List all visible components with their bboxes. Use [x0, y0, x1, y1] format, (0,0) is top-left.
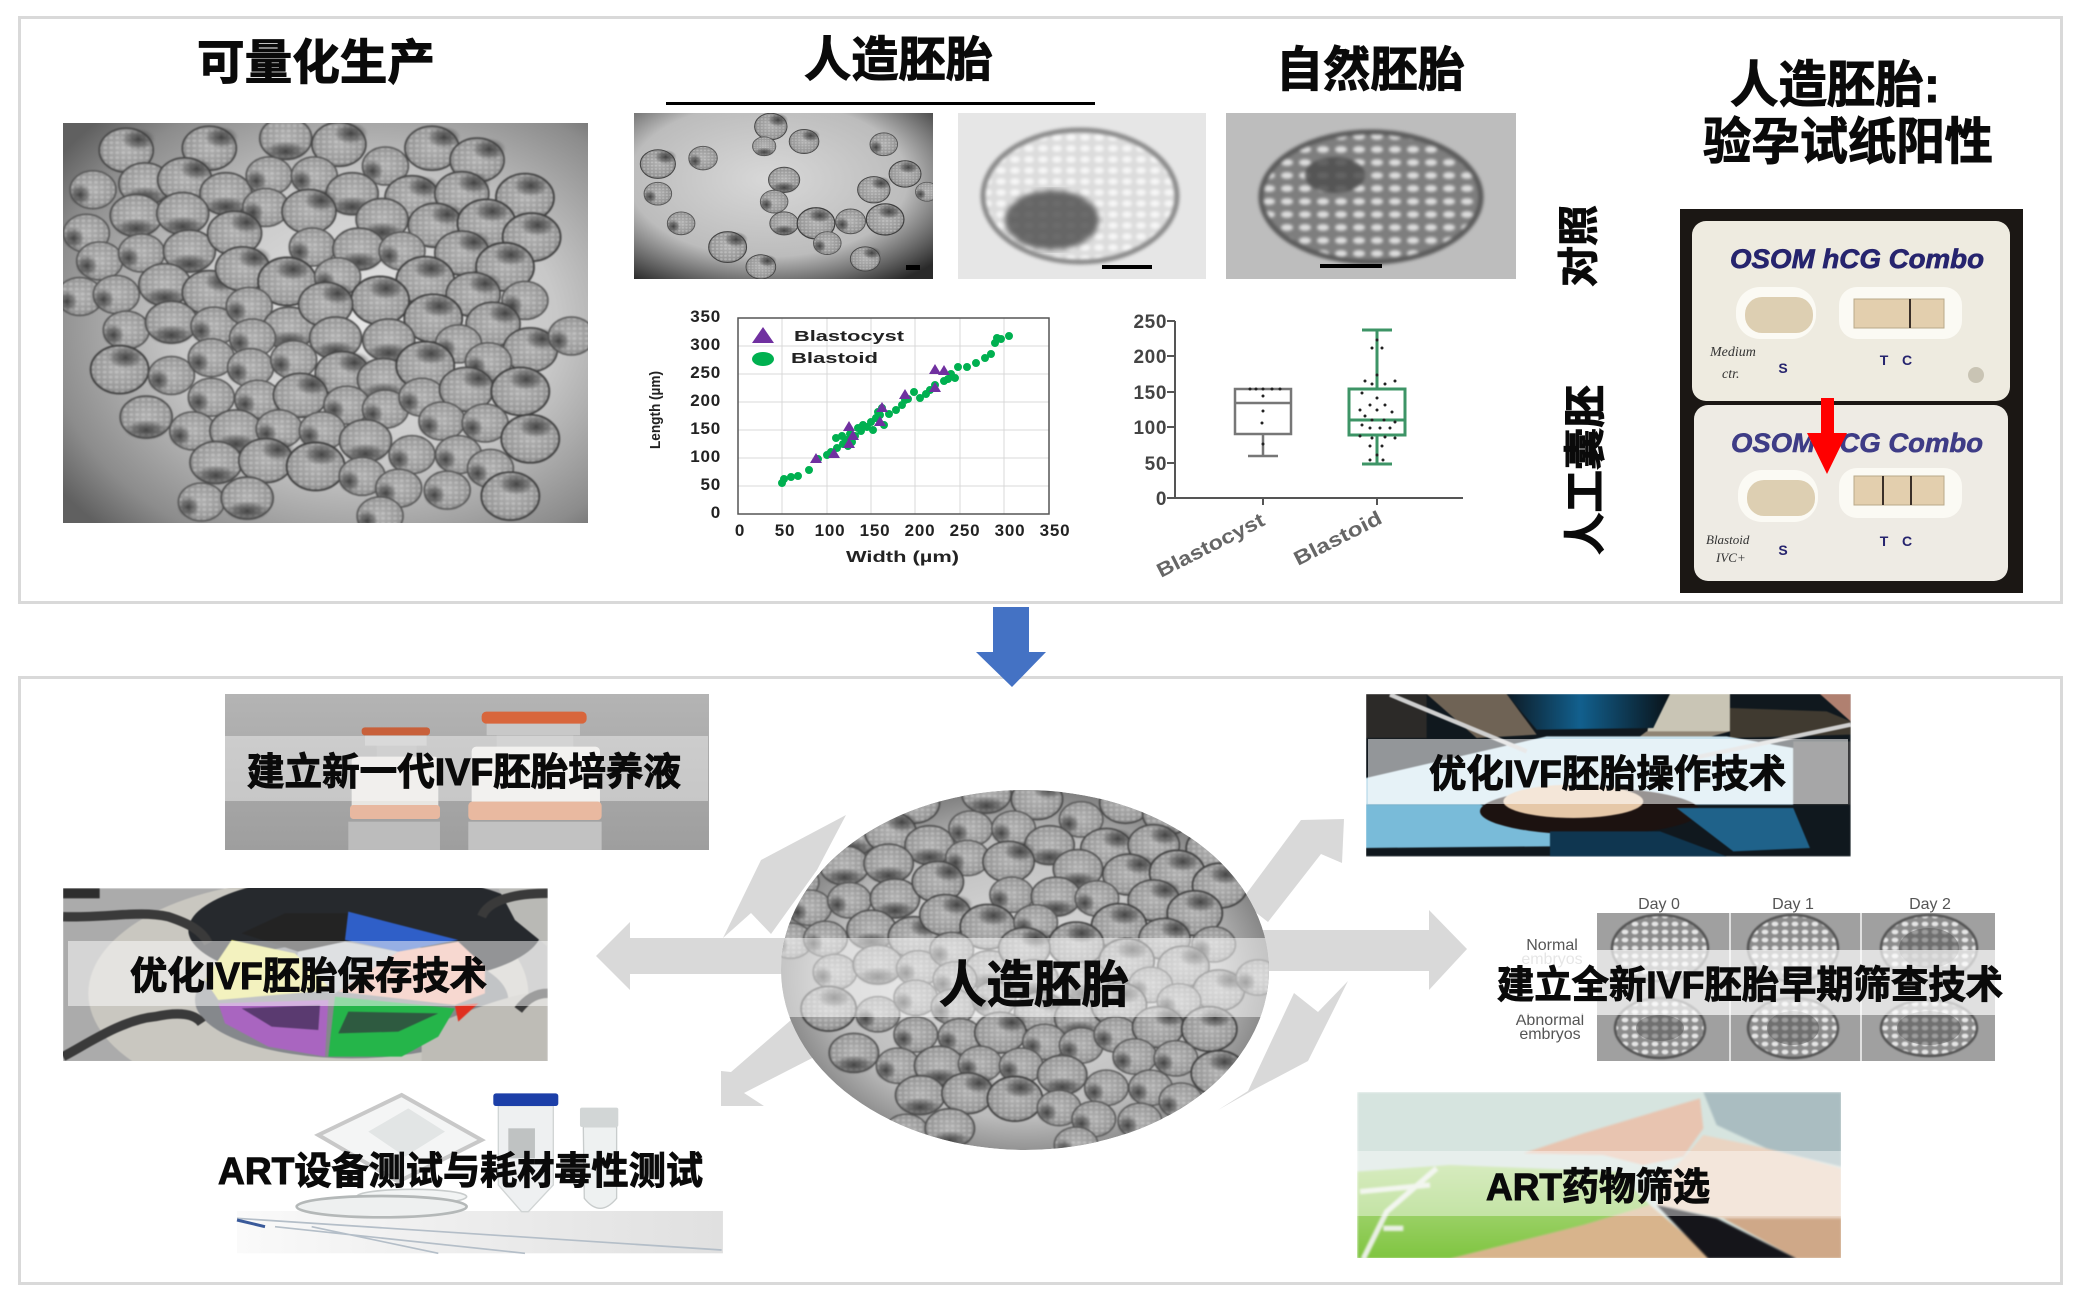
- x-axis tick labels: 100: [815, 521, 845, 540]
- label: 建立全新IVF胚胎早期筛查技术: [1497, 965, 2003, 1007]
- y-axis tick labels: 350: [690, 307, 721, 326]
- image: culture medium bottles: [348, 712, 602, 850]
- image: mass-produced blastoids micrograph: [56, 117, 594, 535]
- y-axis tick labels: 300: [690, 335, 721, 354]
- label: ART药物筛选: [1486, 1167, 1710, 1209]
- y-axis tick labels: 50: [1145, 454, 1167, 475]
- row labels: Abnormal: [1516, 1012, 1584, 1029]
- card: embryo manipulation: [1366, 694, 1851, 856]
- arrow: blue down arrow: [976, 607, 1046, 687]
- x-axis tick labels: 50: [775, 521, 795, 540]
- image: hCG test cassettes: [1680, 209, 2023, 593]
- heading: blastoid column: 人造胚胎: [804, 34, 993, 87]
- day labels: Day 1: [1772, 896, 1814, 913]
- y-axis tick labels: 150: [690, 419, 721, 438]
- cassette: blastoid: IVC+: [1715, 550, 1746, 565]
- image: dish and tubes: [237, 1093, 723, 1253]
- scatter chart: blastoid size vs blastocyst: [647, 307, 1070, 566]
- y-axis tick labels: 200: [690, 391, 721, 410]
- category labels: Blastocyst: [1153, 509, 1269, 582]
- legend: Blastoid: [791, 350, 878, 367]
- cassette: blastoid: S: [1778, 542, 1788, 558]
- cassette: blastoid: OSOM hCG Combo: [1731, 428, 1983, 458]
- box plot: blastocyst vs blastoid: [1133, 312, 1463, 582]
- arrow: red indicator: [1807, 398, 1847, 474]
- label: 建立新一代IVF胚胎培养液: [247, 752, 681, 794]
- image: embryo day grid: [1597, 913, 1995, 1061]
- heading: pregnancy test positive: 人造胚胎:: [1730, 57, 1940, 113]
- row labels: Normal: [1526, 937, 1578, 954]
- label: 优化IVF胚胎保存技术: [130, 956, 487, 998]
- row label: control: 对照: [1556, 205, 1602, 287]
- arrow: to manipulation: [1241, 819, 1344, 922]
- center oval: blastoids: [781, 790, 1269, 1150]
- label: 优化IVF胚胎操作技术: [1429, 754, 1786, 796]
- y-axis tick labels: 250: [690, 363, 721, 382]
- y-axis tick labels: 50: [700, 475, 721, 494]
- panel: top research panel: [20, 18, 2062, 602]
- arrow: to early screening: [1250, 910, 1467, 990]
- card: early embryo screening: [1497, 896, 2003, 1061]
- y-axis tick labels: 0: [711, 503, 721, 522]
- heading: scalable production: 可量化生产: [197, 37, 435, 90]
- y-axis tick labels: 150: [1133, 383, 1167, 404]
- data dots: [1250, 340, 1395, 460]
- y-axis tick labels: [1133, 312, 1167, 510]
- y-axis tick labels: 100: [1133, 418, 1167, 439]
- x-axis tick labels: 150: [860, 521, 890, 540]
- card: cryopreservation: [63, 888, 548, 1061]
- day labels: [1638, 896, 1951, 913]
- x-axis tick labels: 0: [735, 521, 745, 540]
- x-axis title: Width (µm): [846, 549, 959, 566]
- cassette: control: S: [1778, 360, 1788, 376]
- box: blastoid: [1349, 330, 1405, 464]
- cassette: blastoid: T: [1880, 533, 1889, 549]
- heading: pregnancy test positive: 验孕试纸阳性: [1703, 114, 1993, 170]
- y-axis title: Length (µm): [647, 371, 664, 449]
- row labels: embryos: [1521, 951, 1583, 968]
- image: single blastoid: [958, 113, 1206, 279]
- cassette: control: T: [1880, 352, 1889, 368]
- cassette: control: Medium: [1709, 345, 1756, 360]
- cassette: blastoid: Blastoid: [1706, 532, 1750, 547]
- heading: blastoid column: [666, 34, 1095, 105]
- category labels: Blastoid: [1290, 507, 1386, 570]
- arrow: to culture medium: [723, 815, 846, 938]
- cassette: blastoid: C: [1902, 533, 1912, 549]
- cassette: control: ctr.: [1722, 367, 1740, 382]
- x-axis tick labels: [735, 521, 1070, 540]
- segments: colored racks: [205, 912, 485, 1057]
- arrow: to cryopreservation: [596, 922, 800, 990]
- x-axis tick labels: 250: [950, 521, 980, 540]
- image: blastoid field: [634, 113, 938, 279]
- cassette: control: C: [1902, 352, 1912, 368]
- blastoid data points: [782, 336, 1009, 483]
- x-axis tick labels: 200: [905, 521, 935, 540]
- label: ART设备测试与耗材毒性测试: [218, 1151, 703, 1193]
- panel: bottom application panel: [20, 678, 2062, 1284]
- blastocyst data points: [810, 364, 950, 463]
- cassette: blastoid: [1694, 405, 2008, 581]
- row labels: embryos: [1519, 1026, 1581, 1043]
- box: blastocyst: [1235, 389, 1291, 456]
- y-axis tick labels: 100: [690, 447, 721, 466]
- legend: Blastocyst: [794, 328, 904, 345]
- heading: pregnancy test positive: [1703, 57, 1993, 170]
- image: natural blastocyst: [1226, 113, 1516, 279]
- row labels: [1516, 937, 1584, 1043]
- arrow: to drug screening: [1218, 981, 1348, 1110]
- card: ART equipment and consumables: [218, 1093, 723, 1253]
- category labels: [1153, 507, 1386, 582]
- x-axis tick labels: 350: [1040, 521, 1070, 540]
- card: new culture medium: [225, 694, 709, 850]
- y-axis tick labels: [690, 307, 721, 522]
- cassette: control: [1692, 221, 2010, 401]
- y-axis tick labels: 0: [1156, 489, 1167, 510]
- day labels: Day 0: [1638, 896, 1680, 913]
- x-axis tick labels: 300: [995, 521, 1025, 540]
- y-axis tick labels: 250: [1133, 312, 1167, 333]
- y-axis tick labels: 200: [1133, 347, 1167, 368]
- arrow: to lab consumables: [721, 1020, 824, 1106]
- day labels: Day 2: [1909, 896, 1951, 913]
- legend: [752, 327, 904, 367]
- center label: 人造胚胎: [939, 957, 1129, 1013]
- cassette: control: OSOM hCG Combo: [1730, 244, 1984, 274]
- row label: artificial blastoid: 人工囊胚: [1562, 385, 1609, 555]
- heading: natural embryo column: 自然胚胎: [1276, 44, 1465, 97]
- card: ART drug screening: [1357, 1092, 1842, 1259]
